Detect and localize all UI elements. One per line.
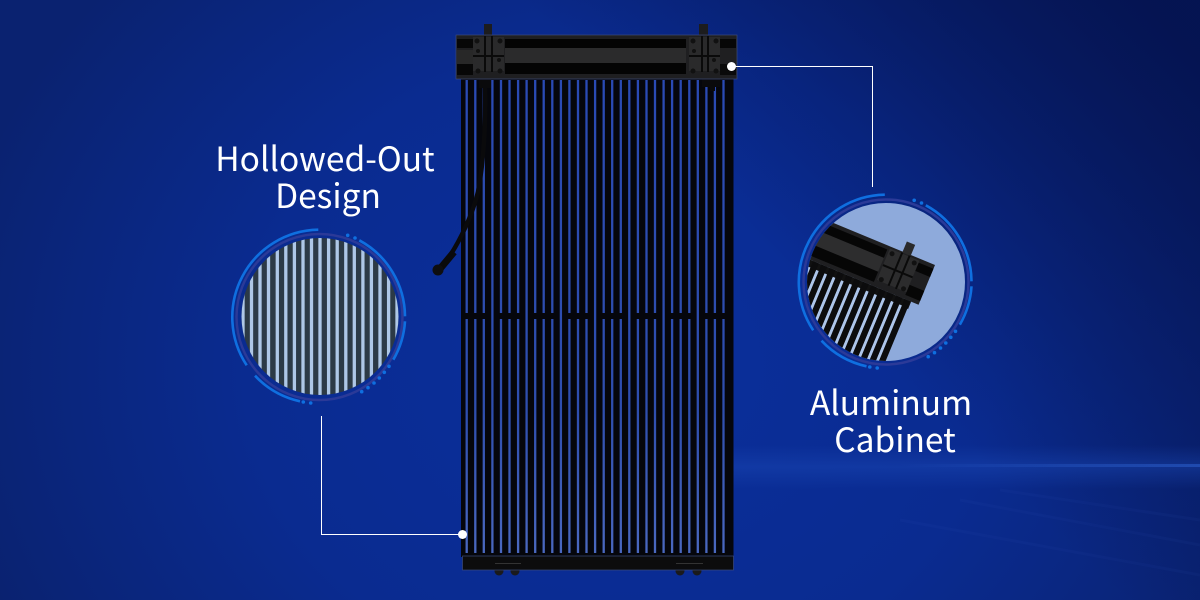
- stripes: [243, 230, 397, 400]
- detail circle: hollowed-out stripes: [232, 230, 405, 405]
- LED panel product: [432, 24, 737, 576]
- detail circle: cabinet corner: [798, 193, 973, 370]
- top cabinet bar: [456, 24, 737, 79]
- bottom cabinet bar: [462, 556, 734, 576]
- rotated cabinet close-up: [807, 223, 935, 361]
- power cable: [432, 84, 485, 276]
- close-up fins: [807, 260, 912, 361]
- close-up bar: [810, 223, 935, 305]
- cable clips under top bar: [479, 79, 720, 91]
- panel body: [461, 79, 734, 557]
- ring arcs: [232, 230, 405, 405]
- callout line: hollowed-out design: [322, 416, 467, 539]
- heading: hollowed-out design: Hollowed-Out: [215, 132, 435, 181]
- ring arcs: [799, 195, 972, 370]
- panel middle crossbars: [464, 313, 728, 319]
- heading: aluminum cabinet: Cabinet: [834, 413, 956, 462]
- heading: hollowed-out design: Design: [275, 169, 381, 218]
- callout line: aluminum cabinet: [727, 62, 872, 187]
- panel fin gaps: [467, 80, 724, 553]
- heading: aluminum cabinet: Aluminum: [810, 376, 972, 425]
